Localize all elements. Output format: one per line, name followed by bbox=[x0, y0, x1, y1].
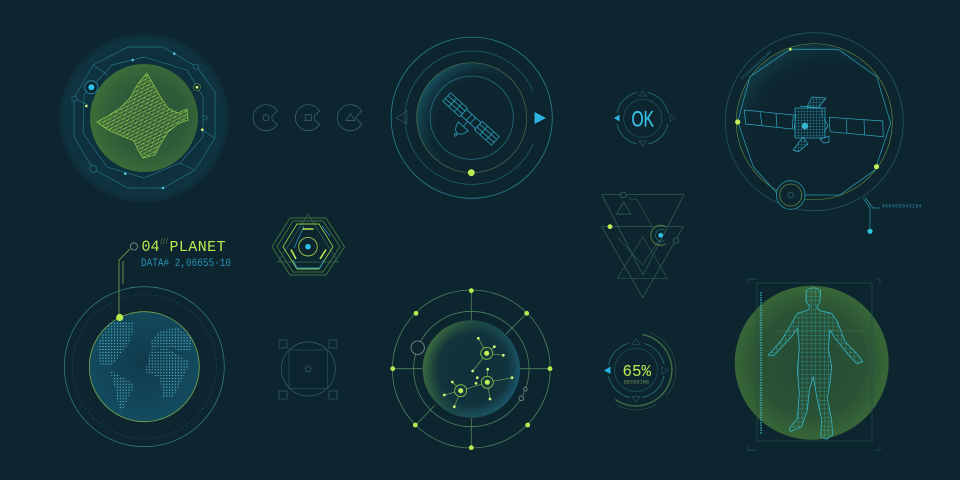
arrow: left bbox=[396, 111, 407, 124]
OK label: OK bbox=[632, 106, 654, 132]
green scan sphere bbox=[735, 286, 889, 440]
triangle outlines bbox=[602, 195, 684, 298]
dashed scale bbox=[760, 292, 762, 434]
data line: DATA# 2,06655·10 bbox=[141, 258, 231, 270]
planet outer glow bbox=[59, 33, 229, 203]
side node bbox=[673, 238, 679, 243]
planet title bbox=[142, 238, 226, 256]
panel: terrain planet bbox=[59, 33, 229, 203]
blue marker dot bbox=[867, 229, 873, 234]
leaf nodes bbox=[443, 337, 513, 408]
planet title: /// bbox=[160, 238, 168, 247]
icon: square bbox=[295, 105, 320, 131]
rings and spokes bbox=[392, 290, 550, 448]
molecule links bbox=[444, 338, 512, 407]
leader line bbox=[119, 249, 130, 317]
panel: human body scan bbox=[735, 279, 889, 450]
orbit markers bbox=[72, 52, 207, 189]
ring accent circles bbox=[411, 341, 527, 401]
target marker bbox=[651, 225, 666, 245]
sensor circle bbox=[776, 181, 805, 209]
arrow: left blue bbox=[604, 366, 610, 374]
outer ring nodes bbox=[390, 288, 552, 450]
green marker bbox=[608, 224, 612, 229]
body wireframe bbox=[768, 288, 863, 439]
wireframe terrain bbox=[97, 73, 188, 158]
dial triangles bbox=[639, 91, 676, 146]
planet title: 04 bbox=[142, 238, 160, 256]
planet title: PLANET bbox=[170, 239, 226, 256]
icon: targeting square bbox=[279, 340, 337, 399]
arrow: right bbox=[534, 112, 546, 124]
green marker bbox=[116, 314, 123, 321]
orbit polygons bbox=[74, 47, 215, 188]
top node bbox=[620, 192, 626, 198]
satellite wireframe bbox=[744, 97, 883, 152]
green planet sphere bbox=[90, 64, 198, 172]
hexagon outlines bbox=[272, 214, 344, 275]
dial rings bbox=[617, 92, 668, 144]
curved scale label: 32165465432165496 bbox=[741, 50, 774, 81]
panel: decoding gauge bbox=[604, 332, 676, 410]
icons: notched circle trio bbox=[253, 105, 362, 131]
concentric rings bbox=[391, 37, 552, 198]
dotted continents bbox=[97, 321, 192, 412]
panel: molecule globe bbox=[390, 288, 552, 450]
sphere bbox=[423, 320, 520, 418]
gauge rings bbox=[608, 332, 676, 410]
data label: 456465343154 bbox=[882, 204, 922, 210]
hexagon target bbox=[299, 237, 317, 256]
panel: OK dial bbox=[614, 91, 676, 146]
scan frame bbox=[748, 279, 880, 450]
gauge triangles bbox=[632, 338, 668, 402]
globe bbox=[89, 312, 199, 422]
percent value: 65% bbox=[622, 363, 652, 382]
icon: triangle bbox=[337, 105, 362, 131]
markers bbox=[735, 48, 879, 169]
earth rings bbox=[64, 287, 224, 447]
panel: satellite radar bbox=[391, 37, 552, 198]
icon: satellite bbox=[431, 93, 499, 158]
hub nodes bbox=[455, 347, 493, 397]
panel: large satellite bbox=[725, 33, 922, 234]
panel: triangles bbox=[602, 192, 684, 298]
hexagon dashes bbox=[291, 229, 326, 259]
leader end circle bbox=[130, 243, 138, 250]
icon: circle bbox=[253, 105, 277, 131]
panel: earth bbox=[64, 238, 231, 447]
panel: hexagon badge bbox=[272, 214, 344, 275]
inner hexagon bbox=[293, 226, 330, 268]
leader lines bbox=[863, 197, 880, 230]
decoding label: DECODING bbox=[624, 380, 649, 386]
scope rings bbox=[725, 33, 903, 211]
arrow: left blue bbox=[614, 114, 620, 122]
green marker bbox=[468, 169, 475, 176]
